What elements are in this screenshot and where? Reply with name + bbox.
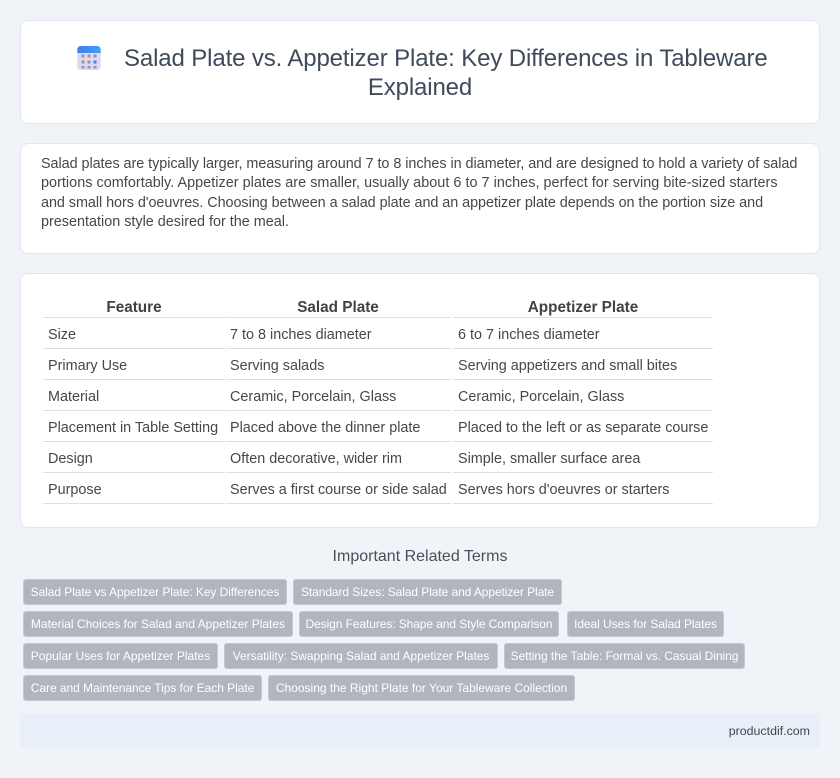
table row: design: Simple, smaller surface area — [458, 451, 640, 467]
table row: material: Material — [48, 389, 99, 405]
table row: primary use: Serving appetizers and small bites — [458, 358, 677, 374]
tag: Salad Plate vs Appetizer Plate: Key Differences — [31, 585, 279, 599]
tag: Choosing the Right Plate for Your Tableware Collection — [276, 681, 567, 695]
tag: Care and Maintenance Tips for Each Plate — [31, 681, 254, 695]
related term tags — [23, 579, 745, 701]
tag: Design Features: Shape and Style Comparison — [306, 617, 552, 631]
table row: purpose — [48, 482, 670, 498]
table row: primary use: Serving salads — [230, 358, 324, 374]
tag — [268, 675, 575, 701]
panel: intro text: presentation style desired for the meal. — [41, 214, 289, 230]
panel: intro text — [20, 143, 820, 254]
tag — [23, 611, 293, 637]
table header: Feature — [106, 299, 162, 316]
tag — [23, 643, 218, 669]
table row: size — [48, 327, 600, 343]
footer bar — [20, 714, 820, 748]
tag: Ideal Uses for Salad Plates — [574, 617, 717, 631]
table row: material — [48, 389, 624, 405]
icon: calendar — [77, 46, 101, 70]
table header: Appetizer Plate — [528, 299, 638, 316]
tag — [299, 611, 559, 637]
table row: size: 6 to 7 inches diameter — [458, 327, 600, 343]
tag: Material Choices for Salad and Appetizer Plates — [31, 617, 285, 631]
tag — [567, 611, 724, 637]
table row: primary use — [48, 358, 677, 374]
table row: placement — [48, 420, 708, 436]
panel: intro text: Salad plates are typically larger, measuring around 7 to 8 inches in diameter, and are designed to hold a variety of salad — [41, 156, 797, 172]
table row: material: Ceramic, Porcelain, Glass — [458, 389, 624, 405]
title — [124, 45, 768, 101]
panel: intro text: and small hors d'oeuvres. Choosing between a salad plate and an appetizer plate depends on the portion size and — [41, 195, 763, 211]
tag: Setting the Table: Formal vs. Casual Dining — [511, 649, 738, 663]
table row: size: 7 to 8 inches diameter — [230, 327, 372, 343]
tag — [293, 579, 562, 605]
table row: placement: Placement in Table Setting — [48, 420, 218, 436]
title: Salad Plate vs. Appetizer Plate: Key Differences in Tableware — [124, 45, 768, 72]
tag: Versatility: Swapping Salad and Appetizer Plates — [233, 649, 489, 663]
table row: size: Size — [48, 327, 76, 343]
tag — [23, 579, 287, 605]
table row: material: Ceramic, Porcelain, Glass — [230, 389, 396, 405]
tag: Popular Uses for Appetizer Plates — [31, 649, 210, 663]
panel: intro text: portions comfortably. Appetizer plates are smaller, usually about 6 to 7 inches, perfect for serving bite-sized starters — [41, 175, 778, 191]
title: Explained — [368, 74, 472, 101]
tag: Standard Sizes: Salad Plate and Appetizer Plate — [301, 585, 554, 599]
table header: Salad Plate — [297, 299, 379, 316]
table row: design: Often decorative, wider rim — [230, 451, 402, 467]
heading: related terms: Important Related Terms — [333, 548, 507, 565]
table row: placement: Placed to the left or as separate course — [458, 420, 708, 436]
footer source text: productdif.com — [729, 724, 810, 738]
table row: primary use: Primary Use — [48, 358, 127, 374]
table row: design — [48, 451, 640, 467]
table row: purpose: Purpose — [48, 482, 102, 498]
tag — [224, 643, 498, 669]
panel: comparison table — [20, 273, 820, 528]
tag — [23, 675, 262, 701]
table row: purpose: Serves hors d'oeuvres or starters — [458, 482, 670, 498]
table header — [106, 299, 638, 316]
panel: title header — [20, 20, 820, 124]
tag — [504, 643, 745, 669]
table row: design: Design — [48, 451, 93, 467]
table row: placement: Placed above the dinner plate — [230, 420, 420, 436]
table row: purpose: Serves a first course or side salad — [230, 482, 447, 498]
